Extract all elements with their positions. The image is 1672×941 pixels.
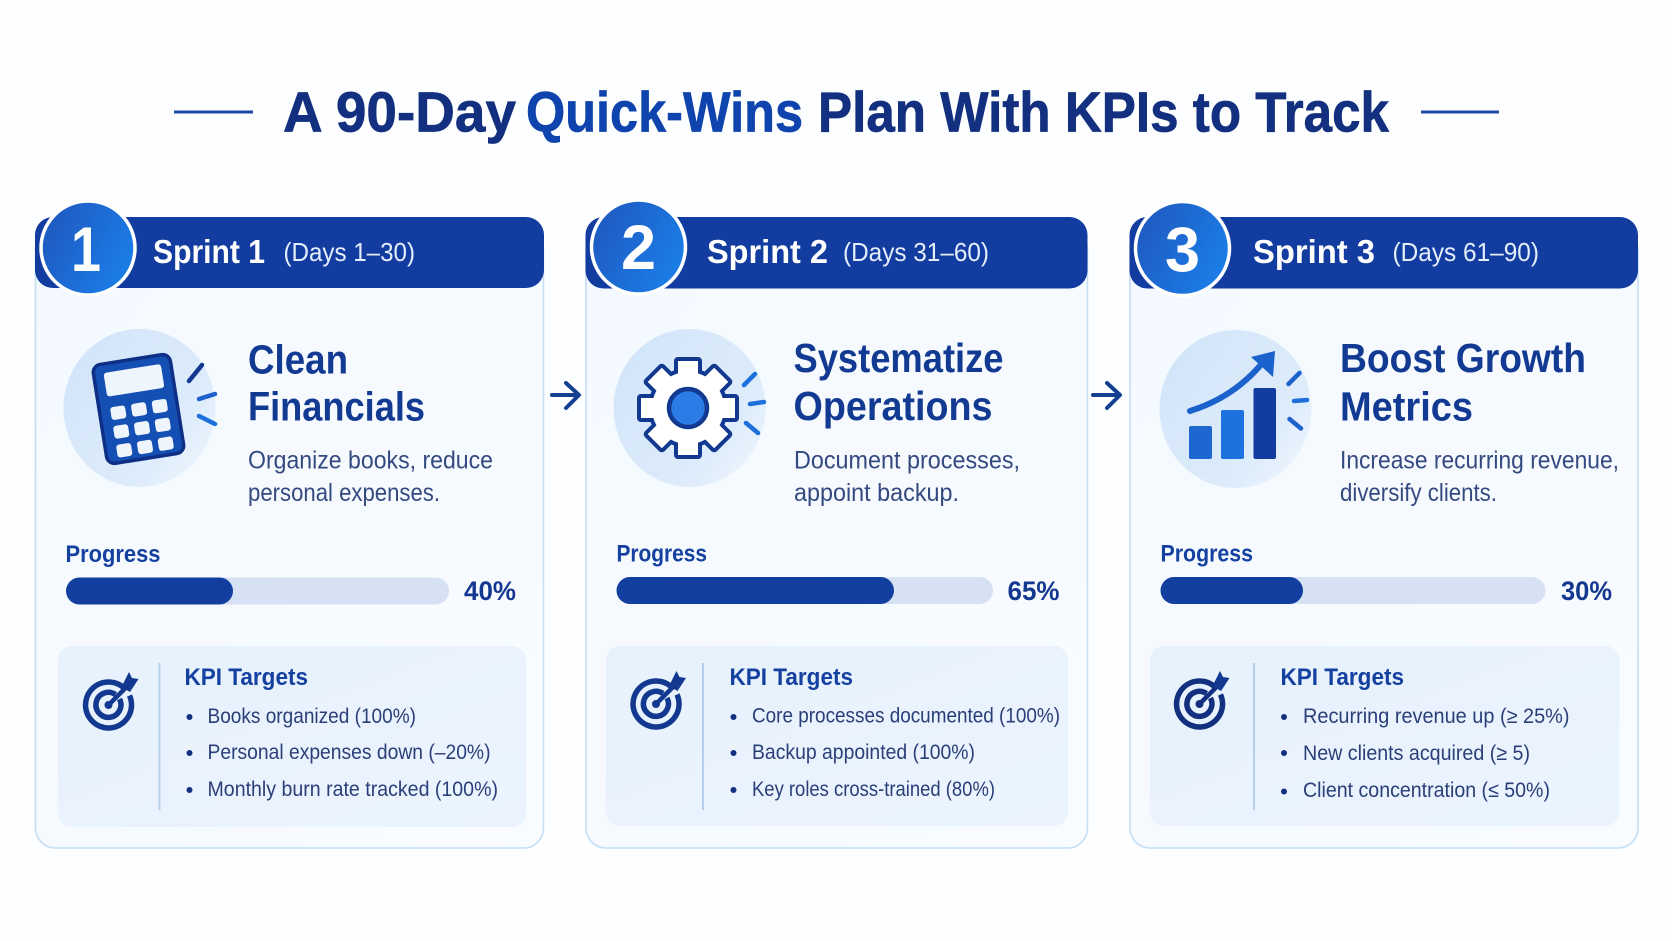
sprint 1 progress: 40% — [464, 576, 516, 606]
arrow: sprint 2 to 3 — [1093, 383, 1120, 408]
sprint 1 description — [248, 446, 493, 507]
sprint 1 heading: Clean — [248, 336, 348, 382]
sprint 2 description: Document processes, — [794, 446, 1020, 474]
title — [174, 80, 1499, 144]
sprint 1 number badge — [41, 201, 135, 295]
sprint 3 KPI box: New clients acquired (≥ 5) — [1303, 742, 1530, 765]
sprint 2 label: Sprint 2 — [707, 233, 828, 270]
sprint 1 progress: Progress — [66, 541, 160, 568]
sprint 1 heading: Financials — [248, 384, 425, 430]
sprint 1 KPI box: KPI Targets — [184, 664, 308, 691]
sprint 1 KPI box — [58, 646, 526, 827]
sprint 3 description: Increase recurring revenue, — [1340, 446, 1619, 474]
sprint 1 progress — [66, 541, 516, 606]
sprint 3 progress: Progress — [1160, 540, 1253, 568]
panel: sprint 2 — [586, 200, 1088, 848]
sprint 3 description — [1340, 446, 1619, 507]
icon: target — [86, 672, 138, 728]
sprint 2 KPI box: Key roles cross-trained (80%) — [752, 778, 995, 801]
title: Plan With KPIs to Track — [818, 80, 1389, 144]
sprint 3 description: diversify clients. — [1340, 479, 1497, 507]
sprint 1 header bar — [35, 217, 544, 288]
sprint 3 header bar — [1130, 217, 1638, 288]
sprint 2 heading: Systematize — [794, 335, 1004, 381]
icon: calculator — [64, 329, 216, 487]
sprint 2 progress — [616, 540, 1060, 606]
sprint 2 KPI box: Core processes documented (100%) — [752, 704, 1060, 728]
sprint 3 KPI box: Recurring revenue up (≥ 25%) — [1303, 705, 1570, 728]
sprint 3 KPI box: KPI Targets — [1280, 664, 1404, 691]
panel: sprint 3 — [1130, 202, 1638, 848]
sprint 1 number badge: 1 — [71, 215, 101, 285]
sprint 1 heading — [248, 336, 425, 430]
arrow: sprint 1 to 2 — [552, 383, 579, 408]
sprint 2 number badge: 2 — [621, 213, 656, 283]
sprint 3 KPI box: Client concentration (≤ 50%) — [1303, 779, 1550, 802]
sprint 2 KPI box: Backup appointed (100%) — [752, 741, 975, 764]
sprint 1 KPI box: Personal expenses down (–20%) — [208, 741, 490, 764]
sprint 1 description: personal expenses. — [248, 479, 440, 507]
sprint 2 KPI box: KPI Targets — [730, 664, 853, 691]
sprint 2 days: (Days 31–60) — [843, 237, 989, 267]
sprint 3 days: (Days 61–90) — [1392, 237, 1539, 267]
sprint 1 days: (Days 1–30) — [284, 237, 415, 267]
sprint 2 heading: Operations — [794, 383, 992, 429]
sprint 2 description — [794, 446, 1020, 507]
icon: growth chart — [1160, 330, 1312, 488]
sprint 1 description: Organize books, reduce — [248, 446, 493, 474]
title: A 90-Day — [283, 80, 516, 144]
sprint 1 KPI box: Books organized (100%) — [208, 705, 416, 728]
icon: gear — [614, 329, 766, 487]
sprint 2 header bar — [586, 217, 1088, 288]
sprint 1 label: Sprint 1 — [153, 233, 265, 270]
sprint 2 progress: 65% — [1008, 576, 1060, 606]
icon: target — [633, 671, 686, 727]
sprint 3 KPI box — [1150, 646, 1620, 826]
sprint 3 progress: 30% — [1561, 576, 1612, 606]
title: Quick-Wins — [526, 80, 803, 144]
sprint 2 heading — [794, 335, 1004, 429]
sprint 3 number badge: 3 — [1165, 216, 1200, 286]
panel: sprint 1 — [35, 201, 544, 848]
sprint 3 heading: Boost Growth — [1340, 335, 1586, 381]
sprint 1 KPI box: Monthly burn rate tracked (100%) — [208, 778, 498, 801]
sprint 3 progress — [1160, 540, 1612, 606]
icon: target — [1177, 671, 1230, 727]
sprint 3 heading — [1340, 335, 1586, 430]
sprint 3 number badge — [1136, 202, 1230, 296]
sprint 3 heading: Metrics — [1340, 384, 1473, 430]
sprint 2 number badge — [592, 200, 686, 294]
sprint 3 label: Sprint 3 — [1253, 233, 1375, 270]
sprint 2 description: appoint backup. — [794, 479, 959, 507]
sprint 2 KPI box — [606, 646, 1068, 826]
sprint 2 progress: Progress — [616, 540, 707, 568]
